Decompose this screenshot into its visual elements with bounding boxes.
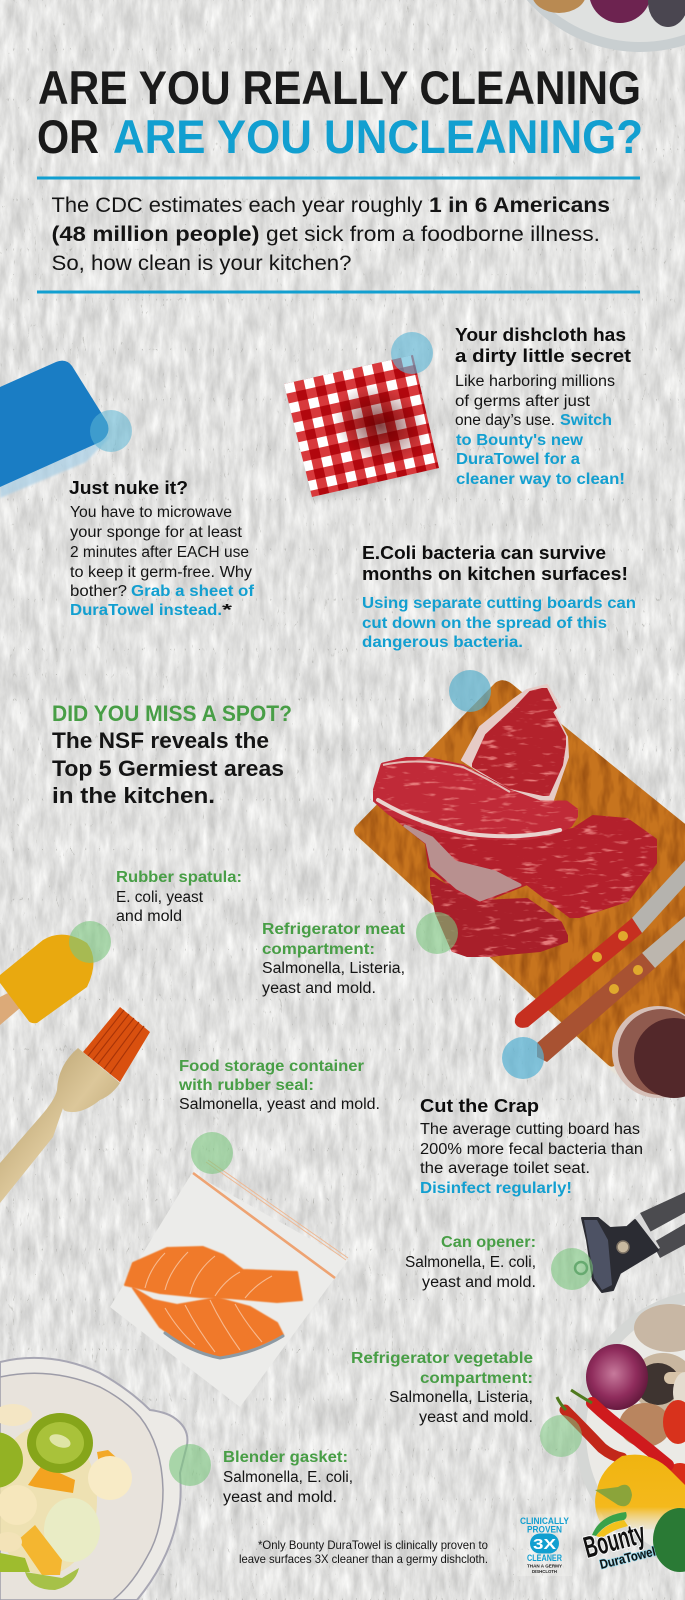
label: food storage container: Salmonella, yeast and mold. <box>179 1096 380 1113</box>
icon: blue sponge <box>0 361 109 498</box>
text: dishcloth secret: to Bounty's new <box>456 432 584 449</box>
text: dishcloth secret: Like harboring millions <box>455 373 615 390</box>
dot: meat compartment <box>416 912 458 954</box>
chili: left <box>565 1410 622 1458</box>
badge: clinically proven 3x cleaner: THAN A GERMY <box>527 1564 562 1568</box>
icon: can opener <box>575 1190 685 1292</box>
heading: did you miss a spot: DID YOU MISS A SPOT? <box>52 701 292 726</box>
opener: rivet <box>617 1241 629 1253</box>
heading: did you miss a spot <box>52 701 292 808</box>
knives <box>515 855 685 1062</box>
dot: cutting board <box>502 1037 544 1079</box>
label: can opener: Salmonella, E. coli, <box>405 1254 536 1271</box>
yellow pepper <box>595 1455 685 1529</box>
brush: handle <box>0 1048 120 1203</box>
title: OR <box>37 110 99 163</box>
text: dishcloth secret: DuraTowel for a <box>456 451 580 468</box>
label: refrigerator meat compartment: compartment: <box>262 941 375 958</box>
label: refrigerator vegetable compartment: Refrigerator vegetable <box>351 1350 533 1367</box>
text: dishcloth secret: cleaner way to clean! <box>456 471 625 488</box>
label: refrigerator vegetable compartment <box>351 1350 533 1426</box>
brush: bristles <box>83 1007 150 1082</box>
top plate with vegetables <box>491 0 685 52</box>
divider <box>37 290 640 294</box>
intro text: get sick from a foodborne illness. <box>266 223 600 246</box>
opener: head <box>582 1218 658 1292</box>
text: just nuke it: to keep it germ-free. Why <box>70 564 252 581</box>
text: just nuke it: You have to microwave <box>70 504 232 521</box>
heading: did you miss a spot: in the kitchen. <box>52 783 215 808</box>
fruit: backing mass <box>0 1425 97 1575</box>
intro text <box>52 194 610 275</box>
label: refrigerator vegetable compartment: compartment: <box>420 1370 533 1387</box>
badge: clinically proven 3x cleaner: PROVEN <box>527 1524 562 1536</box>
opener: gear <box>575 1262 587 1274</box>
dot: food storage <box>191 1132 233 1174</box>
dot: can opener <box>551 1248 593 1290</box>
label: blender gasket: Salmonella, E. coli, <box>223 1469 353 1486</box>
blender with fruit <box>0 1358 187 1600</box>
bag <box>110 1173 348 1407</box>
dot: dishcloth <box>391 332 433 374</box>
salmon: bottom fillet <box>133 1288 283 1357</box>
intro text: (48 million people) <box>52 223 260 246</box>
text: dishcloth secret <box>455 324 631 488</box>
label: food storage container: Food storage container <box>179 1058 364 1075</box>
dot: vegetable compartment <box>540 1415 582 1457</box>
text: cut the crap: the average toilet seat. <box>420 1160 590 1177</box>
text: E. coli fact: cut down on the spread of this <box>362 615 607 632</box>
intro text: The CDC estimates each year roughly <box>52 194 423 217</box>
label: blender gasket: Blender gasket: <box>223 1449 348 1466</box>
raw meat <box>373 685 657 957</box>
text: dishcloth secret: one day’s use. <box>455 412 555 429</box>
dot: sponge <box>90 410 132 452</box>
divider <box>37 176 640 180</box>
steak: large lower piece <box>390 813 657 918</box>
fat area of lower piece <box>405 826 520 900</box>
label: blender gasket <box>223 1449 353 1506</box>
label: can opener <box>405 1234 536 1291</box>
label: food storage container <box>178 1058 380 1113</box>
fruit: pale pear <box>44 1498 100 1562</box>
icon: basting brush <box>0 1007 150 1203</box>
icon: rubber spatula <box>0 935 94 1025</box>
green pepper <box>653 1508 685 1572</box>
badge: clinically proven 3x cleaner: DISHCLOTH <box>532 1569 557 1574</box>
text: E. coli fact <box>362 542 636 651</box>
text: cut the crap: Disinfect regularly! <box>420 1180 572 1197</box>
mushrooms <box>634 1304 685 1352</box>
fruit: bananas <box>0 1485 37 1525</box>
label: rubber spatula: E. coli, yeast <box>116 889 204 906</box>
text: dishcloth secret: a dirty little secret <box>455 345 631 366</box>
label: refrigerator meat compartment: yeast and mold. <box>262 980 376 997</box>
text: just nuke it: 2 minutes after EACH use <box>70 544 249 561</box>
text: just nuke it: your sponge for at least <box>70 524 243 541</box>
text: dishcloth secret: of germs after just <box>455 393 591 410</box>
label: blender gasket: yeast and mold. <box>223 1489 337 1506</box>
label: can opener: Can opener: <box>441 1234 536 1251</box>
knife: brown handle <box>537 953 655 1062</box>
logo: Bounty DuraTowel <box>580 1512 657 1572</box>
heading: did you miss a spot: The NSF reveals the <box>52 728 269 753</box>
vegetable plate <box>557 1289 685 1572</box>
dot: blender <box>169 1444 211 1486</box>
badge: clinically proven 3x cleaner: CLEANER <box>527 1553 562 1563</box>
blender: jar <box>0 1358 187 1600</box>
label: refrigerator vegetable compartment: Salmonella, Listeria, <box>389 1389 533 1406</box>
salmon: top fillet <box>125 1247 302 1302</box>
heading: did you miss a spot: Top 5 Germiest areas <box>52 756 284 781</box>
text: E. coli fact: months on kitchen surfaces! <box>362 563 628 584</box>
dot: spatula <box>69 921 111 963</box>
intro text: So, how clean is your kitchen? <box>52 252 352 275</box>
onion <box>586 1344 648 1410</box>
text: just nuke it: * <box>222 602 234 619</box>
badge: clinically proven 3x cleaner: CLINICALLY <box>520 1516 570 1527</box>
fruit: green bottom <box>25 1568 79 1590</box>
label: rubber spatula: Rubber spatula: <box>116 869 242 886</box>
knife: rivets <box>592 931 643 994</box>
label: can opener: yeast and mold. <box>422 1274 536 1291</box>
fruit: kiwi left <box>0 1432 23 1488</box>
text: just nuke it: DuraTowel instead. <box>70 602 222 619</box>
cutting board <box>354 680 685 1078</box>
label: refrigerator meat compartment <box>262 921 405 997</box>
label: refrigerator meat compartment: Salmonella, Listeria, <box>262 960 405 977</box>
text: E. coli fact: dangerous bacteria. <box>362 634 523 651</box>
dot: meat top <box>449 670 491 712</box>
footnote: *Only Bounty DuraTowel is clinically proven to <box>258 1538 488 1552</box>
salmon: skin <box>165 1333 283 1358</box>
text: cut the crap <box>420 1095 643 1197</box>
icon: checked dishcloth <box>284 355 440 501</box>
text: cut the crap: 200% more fecal bacteria than <box>420 1141 643 1158</box>
logo swoosh <box>592 1512 627 1536</box>
badge: clinically proven 3x cleaner <box>517 1514 572 1576</box>
title <box>37 61 643 163</box>
title: ARE YOU UNCLEANING? <box>113 110 643 163</box>
badge: clinically proven 3x cleaner: 3X <box>533 1536 556 1553</box>
text: E. coli fact: E.Coli bacteria can survive <box>362 542 606 563</box>
label: refrigerator meat compartment: Refrigerator meat <box>262 921 405 938</box>
knife: blade one <box>632 855 685 933</box>
text: dishcloth secret: Switch <box>560 412 612 429</box>
text: just nuke it <box>69 477 255 619</box>
text: cut the crap: The average cutting board has <box>420 1121 640 1138</box>
knife: red handle <box>515 918 642 1028</box>
text: just nuke it: bother? <box>70 583 127 600</box>
footnote <box>239 1538 488 1566</box>
pepper shaker <box>612 1006 685 1098</box>
logo: Bounty DuraTowel: DuraTowel <box>598 1544 657 1572</box>
text: E. coli fact: Using separate cutting boards can <box>362 595 636 612</box>
fruit: orange slices <box>28 1465 75 1493</box>
label: rubber spatula: and mold <box>116 908 182 925</box>
intro text: 1 in 6 Americans <box>429 194 610 217</box>
icon: plastic bag with salmon <box>110 1160 348 1407</box>
text: just nuke it: Grab a sheet of <box>131 583 255 600</box>
text: cut the crap: Cut the Crap <box>420 1095 539 1116</box>
text: just nuke it: Just nuke it? <box>69 477 188 498</box>
fruit: kiwi large <box>27 1413 93 1473</box>
footnote: leave surfaces 3X cleaner than a germy dishcloth. <box>239 1552 488 1566</box>
steak: middle piece <box>373 757 578 840</box>
label: food storage container: with rubber seal: <box>178 1077 314 1094</box>
steak: bottom piece <box>430 877 568 957</box>
chili: right <box>592 1403 668 1465</box>
label: rubber spatula <box>116 869 242 925</box>
text: dishcloth secret: Your dishcloth has <box>455 324 626 345</box>
opener: handles <box>640 1190 685 1233</box>
knife: blade two <box>642 912 685 968</box>
tomatoes <box>663 1400 685 1444</box>
steak: top piece <box>462 685 568 802</box>
label: refrigerator vegetable compartment: yeast and mold. <box>419 1409 533 1426</box>
shallot <box>619 1403 671 1447</box>
